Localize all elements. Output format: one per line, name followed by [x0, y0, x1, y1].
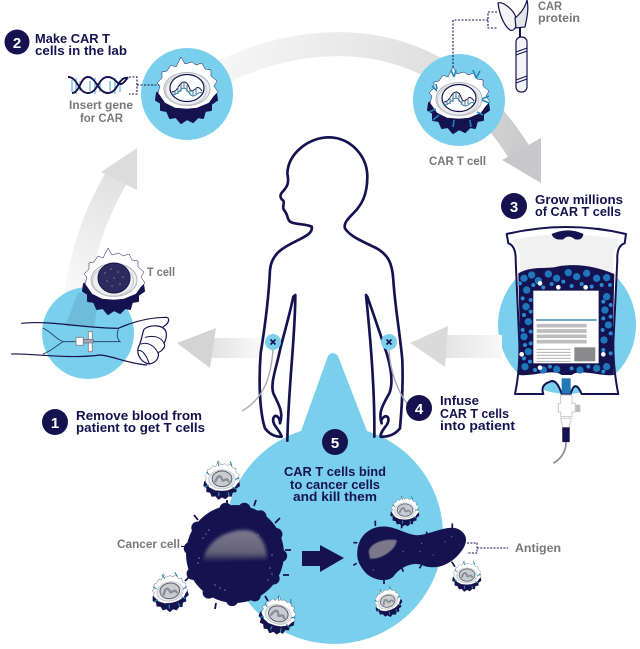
small CAR T cell 4	[391, 496, 419, 526]
arrow: top arc to step 3	[222, 44, 541, 183]
IV bag	[507, 227, 626, 463]
label: CAR protein	[538, 0, 580, 25]
step 3 heading: 3	[510, 199, 518, 216]
antigen callout: Antigen	[515, 541, 561, 555]
step 4 heading: CAR T cells	[440, 406, 509, 421]
panel: CAR T cell circle	[413, 54, 505, 146]
catheter	[76, 337, 83, 345]
small CAR T cell 1	[204, 461, 240, 499]
label: CAR protein: protein	[538, 11, 580, 25]
cell liquid	[518, 265, 614, 375]
arrow: step 1 up to step 2	[72, 148, 137, 322]
step 4 heading: 4	[415, 401, 424, 418]
blue cells	[524, 273, 608, 370]
label: insert gene: Insert gene	[69, 98, 133, 112]
label: insert gene	[69, 98, 133, 125]
step 5 heading: and kill them	[293, 489, 377, 504]
step 4 heading: into patient	[440, 418, 516, 433]
cell: T cell with inserted gene	[156, 57, 218, 123]
step 3 heading: Grow millions	[535, 192, 623, 207]
step 2 heading: cells in the lab	[35, 43, 127, 58]
small CAR T cell 3	[256, 592, 300, 638]
step 5 heading: to cancer cells	[290, 477, 380, 492]
bag top notch	[552, 230, 583, 240]
label: insert gene: for CAR	[80, 111, 123, 125]
step 4 heading: Infuse	[440, 393, 479, 408]
small CAR T cell 2	[149, 570, 191, 614]
small CAR T cell 5	[370, 584, 406, 620]
label: cancer cell: Cancer cell	[117, 537, 180, 551]
step 1 heading	[42, 408, 205, 435]
panel: step 3 circle	[498, 256, 636, 394]
bag upper tint	[512, 234, 621, 273]
bag label	[533, 291, 599, 363]
bag shell	[507, 227, 626, 394]
cell: T cell	[83, 248, 145, 314]
step 5 heading	[284, 429, 386, 504]
cancer cell	[185, 500, 291, 609]
arm with catheter	[12, 317, 169, 365]
label: T cell: T cell	[147, 265, 175, 279]
step 3 heading	[501, 192, 623, 219]
step 5 heading: CAR T cells bind	[284, 464, 386, 479]
panel: step 5 bubble	[225, 353, 443, 644]
step 2 heading: Make CAR T	[35, 31, 110, 46]
label contents	[536, 319, 597, 361]
small CAR T cell 6	[453, 561, 481, 591]
nucleus	[203, 530, 267, 562]
step 1 heading: 1	[51, 415, 59, 432]
arrow: bag to patient	[410, 326, 502, 367]
fist	[138, 326, 166, 364]
arrow: to arm	[177, 328, 262, 368]
icon: CAR protein	[453, 0, 528, 92]
label: CAR T cell: CAR T cell	[429, 154, 486, 168]
arrow: cell killing	[302, 545, 344, 572]
step 1 heading: Remove blood from	[76, 408, 202, 423]
injection sites on arms	[242, 334, 408, 411]
step 2 heading: 2	[13, 35, 21, 52]
step 4 heading	[406, 393, 516, 433]
antigen callout	[467, 541, 561, 555]
cell: CAR T cell	[428, 67, 490, 133]
panel: step 2 circle	[141, 48, 233, 140]
bag port and drip line	[553, 378, 580, 463]
icon: DNA gene for CAR	[68, 77, 168, 94]
step 2 heading	[4, 30, 127, 58]
antigens	[185, 500, 291, 609]
dying cancer cell	[353, 521, 466, 584]
step 1 heading: patient to get T cells	[76, 420, 205, 435]
white bubbles	[522, 283, 603, 368]
step 5 heading: 5	[331, 435, 339, 452]
panel: step 1 arm circle	[42, 287, 134, 379]
patient body outline	[260, 137, 403, 441]
arrow overlay inside step 1 circle	[65, 291, 100, 327]
step 3 heading: of CAR T cells	[535, 204, 621, 219]
